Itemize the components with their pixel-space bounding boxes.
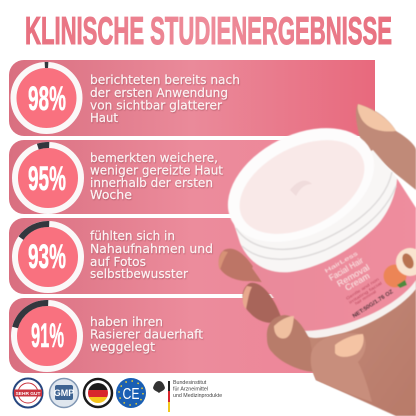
panel: 95% xyxy=(9,140,375,214)
jar rim xyxy=(209,105,393,265)
trust badges xyxy=(14,378,222,412)
text: 98% description: von sichtbar glatterer xyxy=(90,98,223,112)
text: 98% description: berichteten bereits nach xyxy=(90,72,240,87)
text: 91% description: weggelegt xyxy=(90,339,155,354)
finger A xyxy=(219,249,262,282)
progress ring: 98% xyxy=(14,65,80,131)
badge: Sehr gut xyxy=(14,378,42,408)
hand in front of jar xyxy=(267,315,372,402)
text: 93% description: selbstbewusster xyxy=(90,266,189,281)
cream jar xyxy=(209,105,416,338)
text: 91% description xyxy=(90,314,203,354)
jar body xyxy=(252,177,416,336)
panel: 98% xyxy=(9,60,375,136)
text: 91% description: haben ihren xyxy=(90,314,163,329)
progress ring: 93%: 93% xyxy=(28,238,66,276)
text: 93% description: Nahaufnahmen und xyxy=(90,241,213,256)
jar label text: irritating facial xyxy=(348,280,383,305)
hand behind jar xyxy=(219,104,416,416)
badge: CE xyxy=(116,378,146,408)
progress ring: 93% xyxy=(15,224,81,290)
text: Bundesinstitut xyxy=(173,380,222,399)
icon: federal eagle xyxy=(153,381,165,393)
text: 95% description: Woche xyxy=(90,187,132,202)
panel: 93% xyxy=(9,218,375,294)
text: 98% description: der ersten Anwendung xyxy=(90,85,228,100)
text: 93% description xyxy=(90,228,213,281)
jar label text xyxy=(324,251,395,320)
badge: GMP: GMP xyxy=(54,388,74,398)
text: 98% description xyxy=(90,72,240,125)
icon: peach xyxy=(384,248,416,288)
text: 95% description: innerhalb der ersten xyxy=(90,175,213,190)
badge: CE: CE xyxy=(122,386,140,403)
icon: flag bar xyxy=(168,381,170,412)
upper finger xyxy=(356,104,416,190)
jar label text: NET:50G/1.76 OZ xyxy=(352,289,395,320)
jar neck threads xyxy=(236,172,396,259)
jar label text: Gentle and non xyxy=(345,276,380,301)
progress ring: 95%: 95% xyxy=(28,160,66,198)
jar neck xyxy=(230,150,397,272)
cream swirl xyxy=(290,181,312,196)
finger C nail xyxy=(274,316,294,338)
text: 93% description: fühlten sich in xyxy=(90,228,175,243)
text: 95% description: bemerkten weichere, xyxy=(90,150,218,165)
progress ring: 98%: 98% xyxy=(28,80,66,118)
text: 98% description: Haut xyxy=(90,110,118,125)
panel: 91% xyxy=(9,298,375,373)
text: 95% description xyxy=(90,150,223,202)
progress ring: 95% xyxy=(15,145,81,211)
text: Bundesinstitut: und Medizinprodukte xyxy=(173,393,222,399)
jar base rim xyxy=(300,280,416,338)
text: 93% description: auf Fotos xyxy=(90,254,146,269)
thumb nail xyxy=(335,334,364,357)
thumb xyxy=(311,333,372,402)
jar label text: Cream xyxy=(343,271,371,293)
text: 95% description: weniger gereizte Haut xyxy=(90,162,223,178)
palm xyxy=(300,250,416,416)
jar label text: HairLess xyxy=(324,251,359,275)
finger B nail xyxy=(243,286,252,309)
finger B xyxy=(242,283,282,323)
progress ring: 91%: 91% xyxy=(31,317,64,355)
text: Bundesinstitut: Bundesinstitut xyxy=(173,380,207,386)
jar label text: Removal xyxy=(335,262,371,289)
cream xyxy=(224,121,380,253)
text: 91% description: Rasierer dauerhaft xyxy=(90,326,203,342)
text: Bundesinstitut: für Arzneimittel xyxy=(173,386,208,392)
badge: Sehr gut: SEHR GUT xyxy=(16,391,40,397)
jar label text: Facial Hair xyxy=(327,255,365,283)
progress ring: 91% xyxy=(14,303,80,369)
badge: GMP xyxy=(50,378,78,408)
finger A nail xyxy=(219,251,228,270)
jar label text: hair removal xyxy=(354,289,377,306)
upper fingernail xyxy=(358,104,396,131)
finger C xyxy=(267,315,316,372)
badge: German flag xyxy=(84,379,112,407)
